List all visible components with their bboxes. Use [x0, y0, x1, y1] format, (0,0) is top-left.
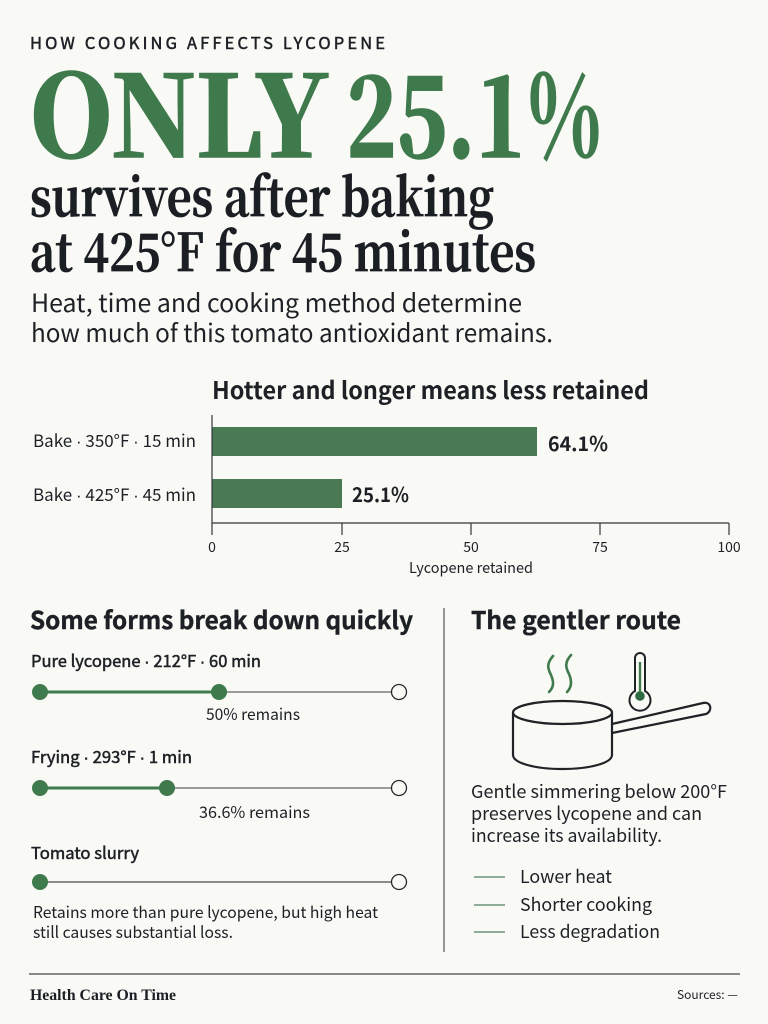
list: benefits: Less degradation [520, 918, 660, 944]
bar values: 64.1% [548, 428, 608, 457]
axis tick labels: 50 [463, 537, 479, 557]
bar values: 25.1% [352, 479, 409, 508]
chart heading: Hotter and longer means less retained [212, 371, 649, 406]
row: tomato slurry: Tomato slurry [31, 840, 139, 864]
row: pure lycopene: 50% remains [206, 701, 300, 725]
headline stat: % [528, 29, 601, 190]
headline stat [30, 29, 601, 190]
panel heading: The gentler route [471, 602, 681, 637]
list: benefits: Lower heat [520, 863, 612, 889]
intro text [31, 284, 553, 350]
row: tomato slurry [31, 840, 406, 943]
row: tomato slurry: still causes substantial loss. [33, 919, 233, 943]
panel heading: Some forms break down quickly [30, 602, 413, 637]
bar values [352, 428, 608, 508]
list: benefits: Shorter cooking [520, 891, 652, 917]
axis tick labels: 25 [334, 537, 350, 557]
subheading: survives after baking [30, 156, 494, 231]
row: frying [31, 744, 406, 823]
body text: Gentle simmering below 200°F [471, 778, 727, 804]
body text [471, 778, 727, 848]
row labels: Bake · 350°F · 15 min [33, 427, 196, 452]
row labels [33, 427, 196, 506]
subheading: at 425°F for 45 minutes [30, 211, 536, 286]
panel: some forms break down quickly [30, 602, 413, 943]
bars [212, 427, 537, 508]
intro text: how much of this tomato antioxidant remains. [31, 314, 553, 350]
axis tick labels [208, 537, 741, 557]
eyebrow: HOW COOKING AFFECTS LYCOPENE [30, 30, 385, 54]
row labels: Bake · 425°F · 45 min [33, 481, 196, 506]
footer brand: Health Care On Time [30, 987, 176, 1004]
headline stat: 25.1 [346, 29, 526, 190]
body text: increase its availability. [471, 822, 662, 848]
icon: steam [548, 655, 571, 692]
icon: thermometer [630, 653, 650, 711]
axis tick labels: 75 [592, 537, 608, 557]
list: benefits [474, 863, 660, 944]
bar chart [33, 371, 741, 578]
panel: the gentler route [471, 602, 727, 944]
body text: preserves lycopene and can [471, 800, 702, 826]
row: frying: 36.6% remains [199, 799, 310, 823]
intro text: Heat, time and cooking method determine [31, 284, 522, 320]
row: pure lycopene: Pure lycopene · 212°F · 60 min [31, 648, 261, 672]
icon: pot [513, 701, 710, 769]
headline stat: ONLY [30, 29, 329, 190]
row: tomato slurry: Retains more than pure lycopene, but high heat [33, 899, 378, 923]
axis title: Lycopene retained [409, 557, 533, 578]
icon: saucepan with steam and thermometer [513, 653, 710, 769]
row: pure lycopene [31, 648, 406, 725]
axis tick labels: 100 [717, 537, 741, 557]
subheading [30, 156, 536, 286]
footer sources: Sources: — [677, 986, 738, 1003]
axis tick labels: 0 [208, 537, 216, 557]
row: frying: Frying · 293°F · 1 min [31, 744, 192, 768]
axis [212, 415, 729, 535]
